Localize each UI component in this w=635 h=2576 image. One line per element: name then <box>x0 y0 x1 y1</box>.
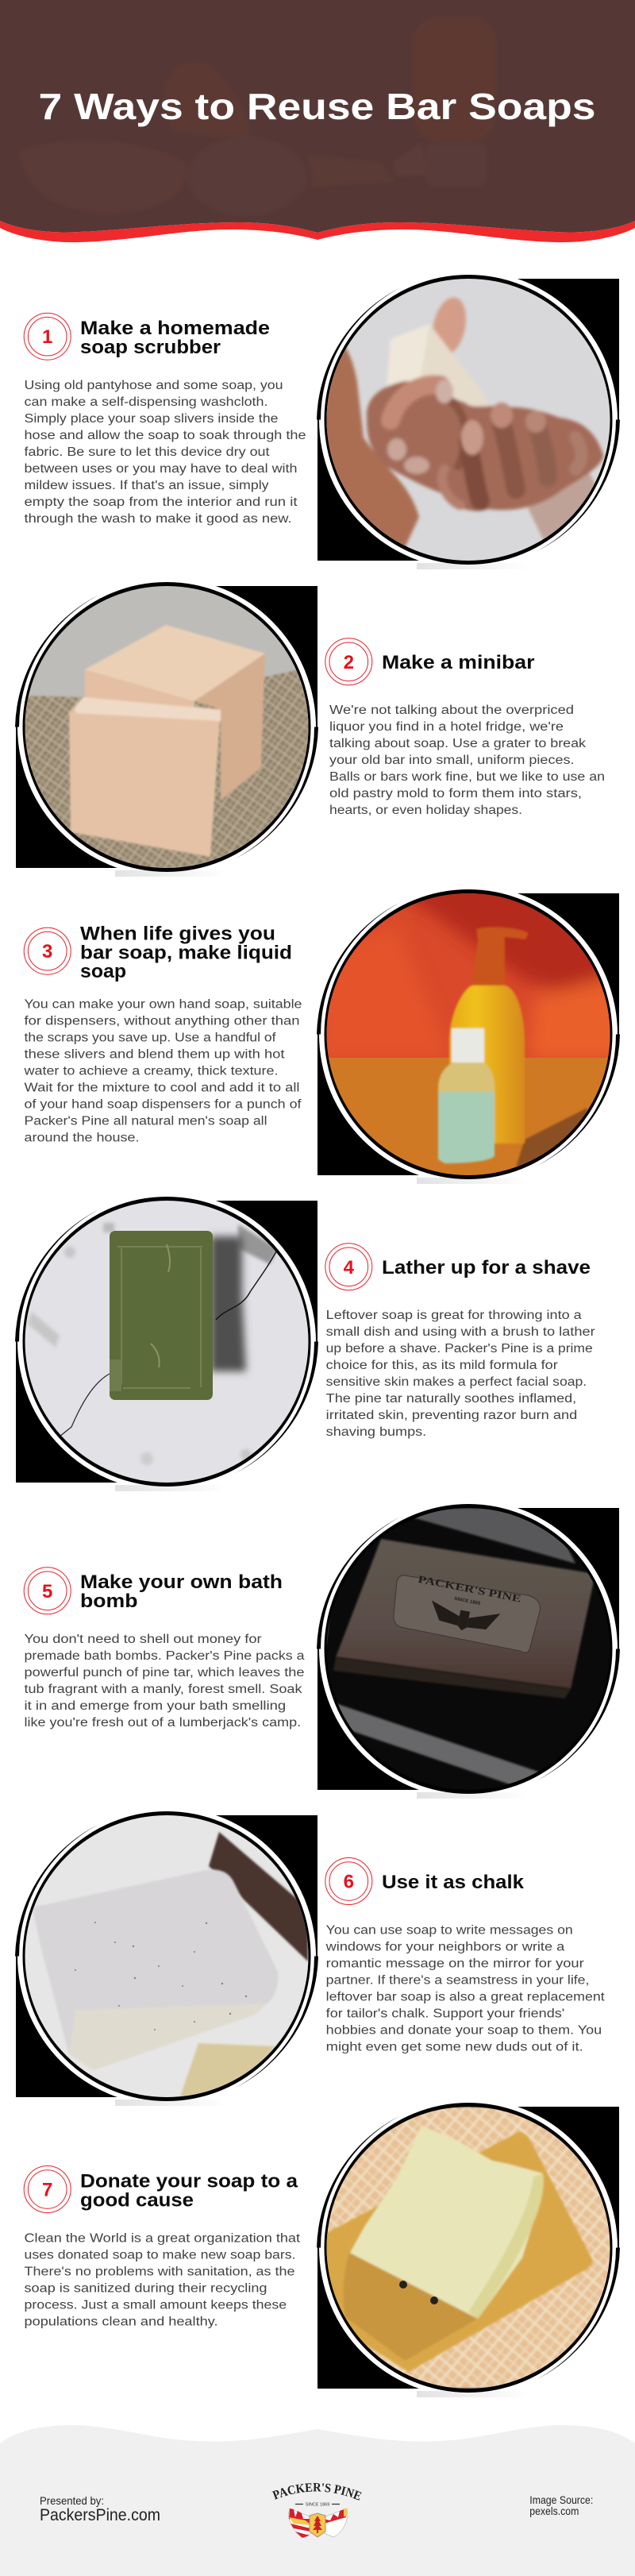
section 1: soap scrubber <box>24 270 620 569</box>
body text 3: around the house. <box>24 1132 140 1145</box>
badge 1 <box>24 313 71 360</box>
heading 5 <box>80 1571 283 1612</box>
body text 3: these slivers and blend them up with hot <box>24 1048 285 1062</box>
heading 7: Donate your soap to a <box>80 2170 298 2192</box>
section 5: bath bomb <box>24 1499 620 1799</box>
photo: white speckled soap <box>15 1807 318 2106</box>
body text 3: water to achieve a creamy, thick texture. <box>23 1065 279 1078</box>
heading 5: bomb <box>80 1591 138 1612</box>
badge 3: 3 <box>42 941 52 962</box>
image source <box>529 2493 593 2517</box>
badge 2: 2 <box>344 652 354 673</box>
photo: green soap on marble <box>15 1193 318 1491</box>
body text 4: small dish and using with a brush to lather <box>326 1325 595 1339</box>
body text 4: The pine tar naturally soothes inflamed, <box>326 1392 576 1406</box>
red wave band <box>0 221 635 242</box>
body text 6: windows for your neighbors or write a <box>325 1940 565 1953</box>
heading 2: Make a minibar <box>382 652 535 673</box>
body text 4: sensitive skin makes a perfect facial soap. <box>326 1375 587 1389</box>
heading 3 <box>80 923 292 982</box>
badge 7: 7 <box>42 2179 52 2201</box>
body text 1: empty the soap from the interior and run it <box>24 496 298 509</box>
badge 1: 1 <box>42 326 52 348</box>
body text 6: hobbies and donate your soap to them. You <box>326 2023 602 2037</box>
heading 7 <box>80 2170 298 2211</box>
section 6: chalk <box>15 1807 605 2106</box>
body text 4 <box>326 1309 595 1439</box>
logo: Packer's Pine: SINCE 1869 <box>306 2503 329 2508</box>
photo: hands holding soap <box>317 270 620 569</box>
body text 7: uses donated soap to make new soap bars. <box>24 2248 295 2262</box>
body text 5: it in and emerge from your bath smelling <box>24 1699 286 1713</box>
heading 1: soap scrubber <box>80 337 221 358</box>
body text 3: the scraps you save up. Use a handful of <box>24 1032 276 1045</box>
badge 3 <box>24 927 71 974</box>
body text 1: between uses or you may have to deal with <box>24 462 297 476</box>
heading 7: good cause <box>80 2189 194 2211</box>
heading 3: soap <box>80 961 126 982</box>
body text 2: We're not talking about the overpriced <box>329 704 574 717</box>
photo: soap on bamboo dish <box>317 2098 620 2397</box>
section 3: liquid soap <box>23 877 635 1184</box>
body text 5: premade bath bombs. Packer's Pine packs a <box>24 1649 305 1663</box>
logo: Packer's Pine: PACKER'S PINE <box>271 2482 362 2501</box>
heading 6: Use it as chalk <box>382 1872 525 1893</box>
section 2: minibar <box>15 578 605 877</box>
heading 5: Make your own bath <box>80 1571 283 1593</box>
body text 5: powerful punch of pine tar, which leaves the <box>24 1666 305 1679</box>
badge 4 <box>325 1244 372 1290</box>
body text 5: like you're fresh out of a lumberjack's camp. <box>24 1716 301 1730</box>
body text 6: romantic message on the mirror for your <box>326 1957 584 1970</box>
badge 6: 6 <box>344 1871 354 1893</box>
header background <box>0 0 635 233</box>
title: 7 Ways to Reuse Bar Soaps <box>38 86 595 127</box>
body text 5: tub fragrant with a manly, forest smell. Soak <box>24 1683 302 1696</box>
body text 1: can make a self-dispensing washcloth. <box>24 395 268 409</box>
body text 3: of your hand soap dispensers for a punch of <box>24 1098 302 1112</box>
presented by: PackersPine.com <box>40 2506 160 2524</box>
body text 2: old pastry mold to form them into stars, <box>329 787 582 800</box>
badge 5: 5 <box>42 1581 52 1602</box>
body text 3: Wait for the mixture to cool and add it to all <box>24 1082 300 1095</box>
badge 4: 4 <box>344 1257 355 1278</box>
body text 7 <box>24 2231 301 2328</box>
image source: pexels.com <box>529 2505 579 2517</box>
section 7: donate <box>24 2098 620 2397</box>
body text 6: leftover bar soap is also a great replacement <box>326 1990 605 2003</box>
heading 4: Lather up for a shave <box>382 1257 591 1278</box>
body text 7: populations clean and healthy. <box>24 2315 217 2328</box>
body text 1: Simply place your soap slivers inside the <box>24 412 278 426</box>
heading 3: When life gives you <box>80 923 275 944</box>
heading 3: bar soap, make liquid <box>80 942 292 963</box>
body text 4: irritated skin, preventing razor burn and <box>326 1409 577 1422</box>
badge 5 <box>24 1568 71 1614</box>
body text 5: You don't need to shell out money for <box>24 1633 262 1646</box>
photo: Packer's Pine dark soap bar <box>317 1499 620 1799</box>
body text 2: liquor you find in a hotel fridge, we're <box>329 720 564 734</box>
body text 4: Leftover soap is great for throwing into a <box>326 1309 582 1322</box>
embossed brand mark <box>418 1575 521 1630</box>
body text 1: fabric. Be sure to let this device dry out <box>24 445 270 459</box>
body text 6: might even get some new duds out of it. <box>326 2040 583 2053</box>
body text 3: You can make your own hand soap, suitable <box>24 998 302 1012</box>
body text 6: You can use soap to write messages on <box>326 1923 573 1937</box>
heading 1: Make a homemade <box>80 318 270 339</box>
body text 4: choice for this, as its mild formula for <box>326 1359 558 1372</box>
presented by: Presented by: <box>40 2494 104 2507</box>
header banner <box>0 0 635 242</box>
body text 3: for dispensers, without anything other than <box>24 1015 300 1028</box>
body text 6 <box>325 1923 605 2053</box>
embossed brand mark: SINCE 1869 <box>454 1597 481 1606</box>
body text 6: partner. If there's a seamstress in your life, <box>326 1973 589 1987</box>
body text 4: up before a shave. Packer's Pine is a prime <box>326 1342 593 1355</box>
body text 2: your old bar into small, uniform pieces. <box>329 754 575 767</box>
image source: Image Source: <box>529 2493 593 2506</box>
body text 2: talking about soap. Use a grater to break <box>329 737 586 750</box>
logo: Packer's Pine <box>271 2482 362 2538</box>
photo: two peach soap bars <box>15 578 318 877</box>
body text 7: Clean the World is a great organization that <box>24 2231 301 2245</box>
body text 3: Packer's Pine all natural men's soap all <box>24 1115 267 1128</box>
body text 4: shaving bumps. <box>326 1425 426 1439</box>
body text 1: through the wash to make it good as new. <box>24 512 292 526</box>
footer <box>0 2425 635 2576</box>
badge 6 <box>325 1858 372 1904</box>
body text 2: Balls or bars work fine, but we like to use an <box>329 770 605 784</box>
faded soap photo in header <box>20 17 496 216</box>
body text 1: hose and allow the soap to soak through the <box>24 429 306 442</box>
body text 2 <box>329 704 605 817</box>
body text 3 <box>23 998 302 1145</box>
body text 7: There's no problems with sanitation, as the <box>24 2265 295 2278</box>
photo: pump bottles on orange <box>317 877 635 1184</box>
body text 1: Using old pantyhose and some soap, you <box>24 379 283 392</box>
body text 7: process. Just a small amount keeps these <box>24 2298 287 2312</box>
body text 6: for tailor's chalk. Support your friends' <box>326 2007 564 2020</box>
body text 5 <box>24 1633 305 1730</box>
badge 7 <box>24 2166 71 2212</box>
presented by <box>40 2494 160 2524</box>
badge 2 <box>325 638 372 685</box>
body text 1 <box>24 379 306 526</box>
body text 2: hearts, or even holiday shapes. <box>329 804 522 817</box>
body text 7: soap is sanitized during their recycling <box>24 2281 267 2295</box>
body text 1: mildew issues. If that's an issue, simply <box>24 479 269 492</box>
heading 1 <box>80 318 270 358</box>
footer background <box>0 2425 635 2576</box>
section 4: shave <box>15 1193 595 1491</box>
embossed brand mark: PACKER'S PINE <box>417 1573 522 1605</box>
